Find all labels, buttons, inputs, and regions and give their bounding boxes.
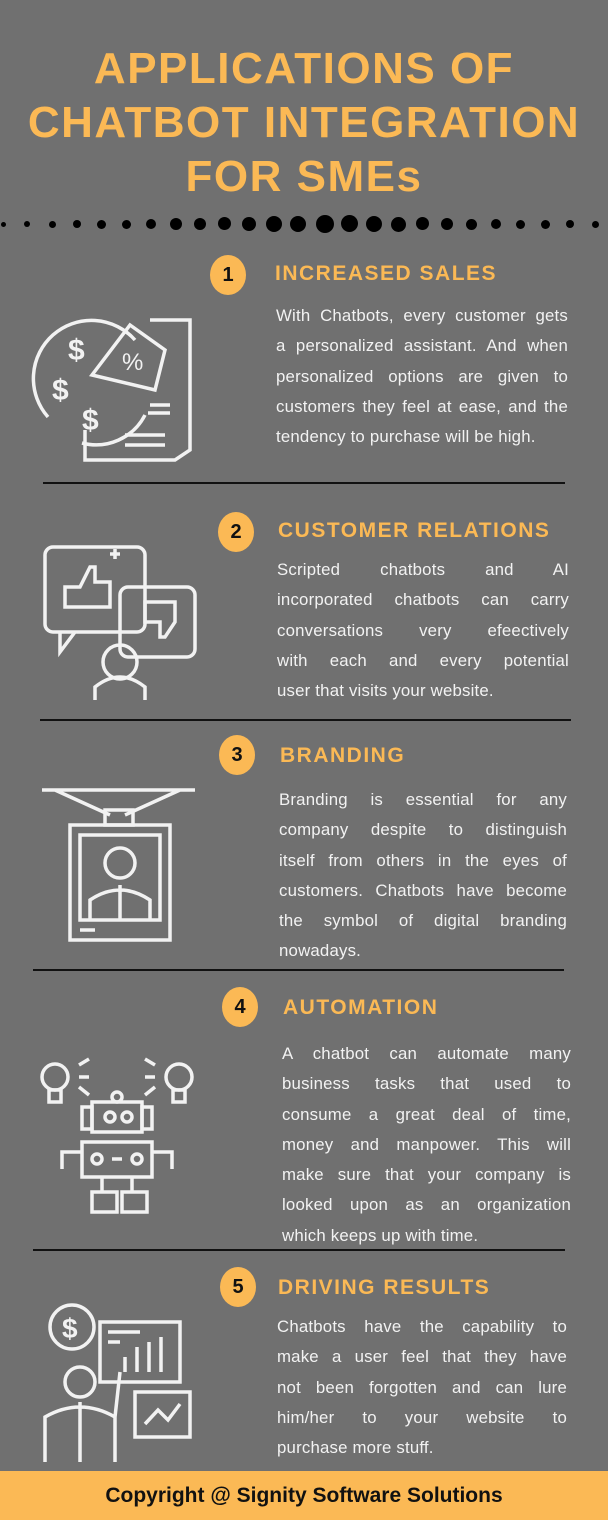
text 3: the symbol of digital branding <box>279 911 567 930</box>
text 1: tendency to purchase will be high. <box>276 427 536 446</box>
text 5: not been forgotten and can lure <box>277 1378 567 1397</box>
text 2: incorporated chatbots can carry <box>277 590 569 609</box>
icon: results presentation <box>43 1303 192 1462</box>
title: FOR SMEs <box>186 152 422 201</box>
section 1 <box>32 255 568 462</box>
footer: Copyright @ Signity Software Solutions <box>105 1484 503 1507</box>
text 4: business tasks that used to <box>282 1074 571 1093</box>
heading 4: AUTOMATION <box>283 996 438 1019</box>
badge 1 <box>210 255 246 295</box>
text 1: personalized options are given to <box>276 367 568 386</box>
badge 4: 4 <box>234 996 246 1018</box>
badge 3 <box>219 735 255 775</box>
section 2 <box>43 512 569 700</box>
icon: sales pie chart: $ <box>82 404 99 437</box>
badge 5 <box>220 1267 256 1307</box>
text 3: nowadays. <box>279 941 361 960</box>
badge 3: 3 <box>231 744 243 766</box>
text 2: with each and every potential <box>277 651 569 670</box>
text 3: company despite to distinguish <box>279 820 567 839</box>
heading 2: CUSTOMER RELATIONS <box>278 519 550 542</box>
text 3 <box>279 790 567 960</box>
text 5: him/her to your website to <box>277 1408 567 1427</box>
icon: sales pie chart: % <box>122 349 143 376</box>
title <box>28 44 580 201</box>
section 5 <box>43 1267 567 1462</box>
badge 2: 2 <box>230 521 242 543</box>
section 4 <box>40 987 571 1245</box>
text 5: make a user feel that they have <box>277 1347 567 1366</box>
icon: feedback <box>43 545 197 700</box>
text 4: which keeps up with time. <box>282 1226 478 1245</box>
badge 2 <box>218 512 254 552</box>
text 5 <box>277 1317 567 1457</box>
text 2 <box>277 560 569 700</box>
dotted divider <box>1 215 599 233</box>
icon: branding portrait <box>42 788 195 942</box>
text 1: With Chatbots, every customer gets <box>276 306 568 325</box>
section 3 <box>42 735 567 960</box>
text 4: looked upon as an organization <box>282 1195 571 1214</box>
heading 1: INCREASED SALES <box>275 262 497 285</box>
heading 3: BRANDING <box>280 744 405 767</box>
text 4: make sure that your company is <box>282 1165 571 1184</box>
text 2: conversations very efeectively <box>277 621 569 640</box>
text 4: money and manpower. This will <box>282 1135 571 1154</box>
text 2: Scripted chatbots and AI <box>277 560 569 579</box>
icon: sales pie chart: $ <box>52 374 69 407</box>
footer <box>0 1471 608 1520</box>
badge 1: 1 <box>222 264 234 286</box>
badge 4 <box>222 987 258 1027</box>
icon: results presentation: $ <box>62 1313 78 1344</box>
text 3: Branding is essential for any <box>279 790 567 809</box>
heading 5: DRIVING RESULTS <box>278 1276 490 1299</box>
text 5: Chatbots have the capability to <box>277 1317 567 1336</box>
text 3: customers. Chatbots have become <box>279 881 567 900</box>
title: CHATBOT INTEGRATION <box>28 98 580 147</box>
text 1: customers they feel at ease, and the <box>276 397 568 416</box>
icon: sales pie chart <box>32 318 192 462</box>
icon: sales pie chart: $ <box>68 334 85 367</box>
badge 5: 5 <box>232 1276 244 1298</box>
text 1 <box>276 306 568 446</box>
text 1: a personalized assistant. And when <box>276 336 568 355</box>
icon: robot <box>40 1058 194 1214</box>
text 2: user that visits your website. <box>277 681 494 700</box>
text 4: consume a great deal of time, <box>282 1105 571 1124</box>
text 4 <box>282 1044 571 1245</box>
text 5: purchase more stuff. <box>277 1438 434 1457</box>
text 4: A chatbot can automate many <box>282 1044 571 1063</box>
text 3: itself from others in the eyes of <box>279 851 567 870</box>
title: APPLICATIONS OF <box>94 44 514 93</box>
